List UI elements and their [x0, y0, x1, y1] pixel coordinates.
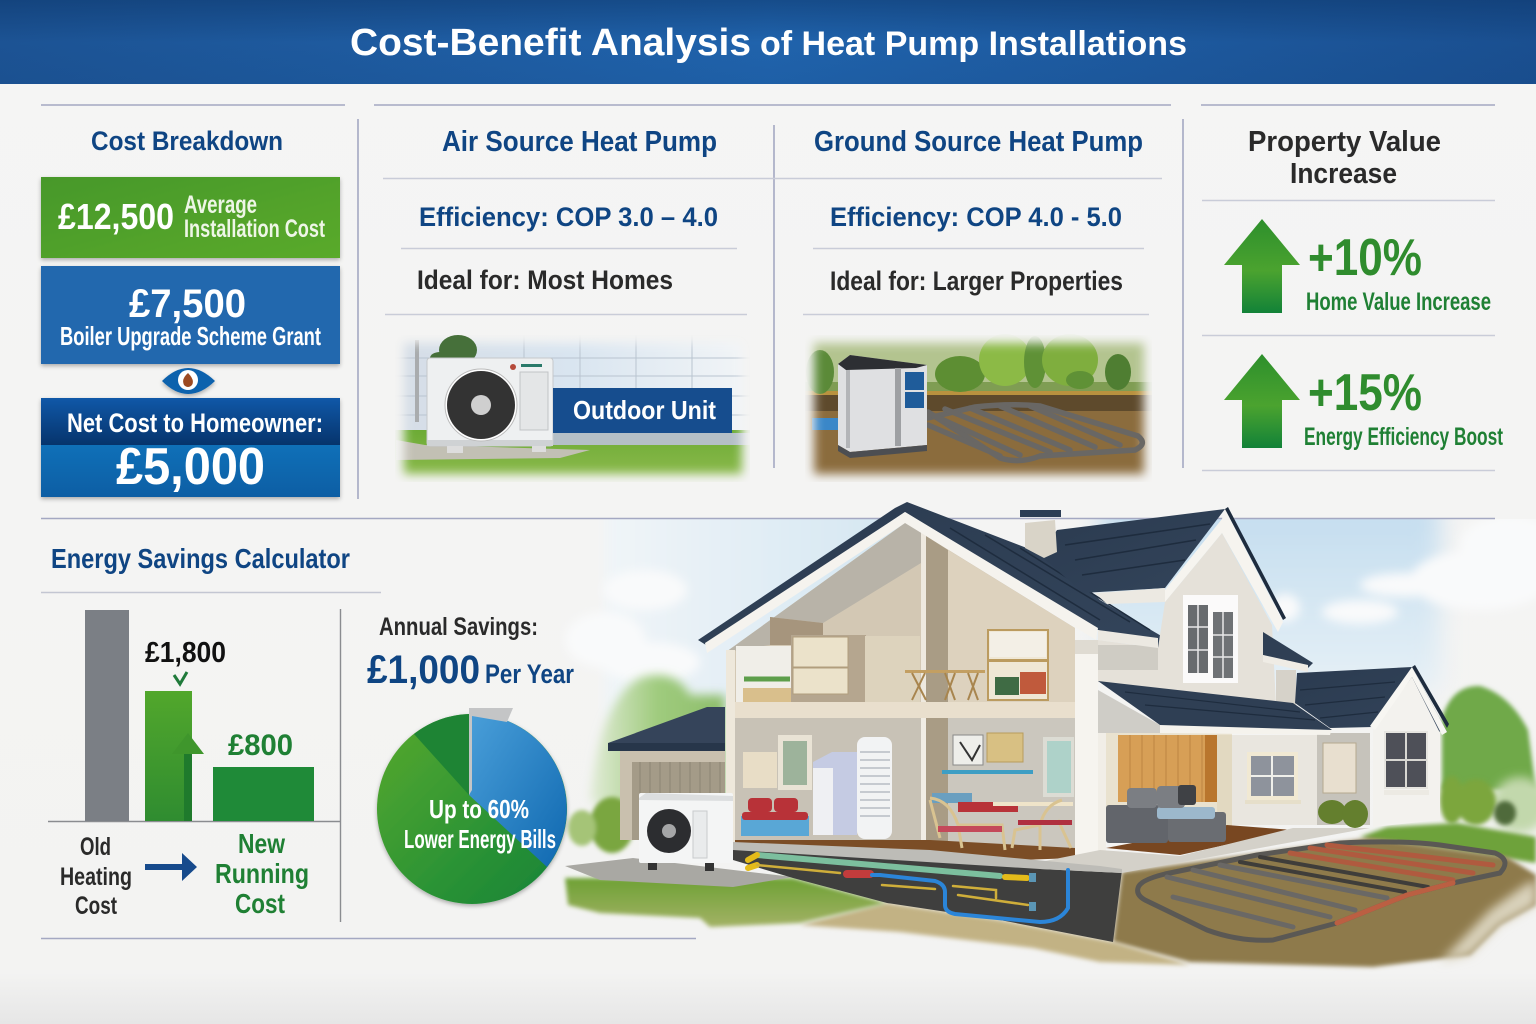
- chairs and table: [930, 798, 1072, 850]
- label: new running cost: New: [238, 828, 285, 859]
- label: new running cost: Running: [215, 858, 309, 889]
- card: average installation cost: Average: [184, 191, 257, 219]
- upper right wall: [1098, 533, 1276, 705]
- annual savings: [367, 613, 574, 692]
- panel: energy savings calculator: [41, 543, 574, 922]
- dormer fascia: [1165, 509, 1283, 632]
- bar chart: [48, 609, 340, 922]
- card: average installation cost: Installation Cost: [184, 215, 325, 243]
- pie chart: [377, 708, 567, 904]
- roof trim board: [1095, 588, 1165, 604]
- sky: [573, 519, 1536, 710]
- bar: new cost: [213, 767, 314, 821]
- icon: up arrow 10: [1224, 219, 1300, 313]
- card: net cost: Net Cost to Homeowner:: [67, 408, 323, 438]
- garage: [608, 707, 725, 840]
- title: Cost-Benefit Analysis: [350, 22, 751, 64]
- title: of Heat Pump Installations: [760, 25, 1187, 63]
- heading: cost breakdown: Cost Breakdown: [91, 126, 283, 156]
- value: 800: £800: [228, 729, 293, 762]
- heading: property value: Property Value: [1248, 126, 1441, 158]
- label: old heating cost: Heating: [60, 863, 132, 891]
- header banner: [0, 0, 1536, 84]
- bar: old cost: [85, 610, 129, 821]
- rear upper wall: [726, 523, 1075, 702]
- small roof: [1263, 632, 1313, 705]
- stat: home value: +10%: [1308, 229, 1422, 287]
- upper rooms: [736, 533, 1075, 703]
- annual savings: Per Year: [485, 659, 574, 689]
- ceiling: [726, 523, 921, 652]
- open patio: [1098, 732, 1293, 855]
- panel: property value increase: [1224, 126, 1503, 451]
- pie chart: Up to 60%: [429, 794, 529, 824]
- illustration: house cutaway: [41, 500, 1536, 967]
- icon: check: [174, 672, 187, 684]
- label: old heating cost: [60, 833, 132, 920]
- annual savings: £1,000: [367, 648, 480, 692]
- card: average installation cost: [41, 177, 340, 258]
- title: [350, 22, 1187, 64]
- ideal for: ground source: Ideal for: Larger Properties: [830, 266, 1123, 296]
- heading: property value: Increase: [1290, 158, 1397, 190]
- label: new running cost: Cost: [235, 888, 285, 919]
- concrete pad: [565, 858, 793, 887]
- walls and pillars: [726, 640, 1098, 856]
- lawn and soil: [565, 823, 1536, 967]
- annual savings: Annual Savings:: [379, 613, 538, 641]
- card: boiler upgrade grant: Boiler Upgrade Scheme Grant: [60, 321, 321, 351]
- label: old heating cost: Cost: [75, 892, 118, 920]
- panel: cost breakdown: [41, 126, 340, 497]
- middle wall: [1232, 733, 1370, 828]
- main roof trim: [1098, 630, 1158, 648]
- foundation: [733, 846, 1122, 942]
- ground floor rooms: [735, 718, 1075, 848]
- label: old heating cost: Old: [80, 833, 111, 861]
- heading: energy savings: Energy Savings Calculator: [51, 543, 350, 574]
- stat: energy efficiency: [1304, 364, 1503, 451]
- label: new running cost: [215, 828, 309, 919]
- label: outdoor unit: [553, 388, 732, 433]
- efficiency: air source: Efficiency: COP 3.0 – 4.0: [419, 202, 718, 232]
- ideal for: air source: Ideal for: Most Homes: [417, 265, 673, 295]
- illustration: outdoor unit: [395, 335, 750, 482]
- outdoor unit: [639, 793, 733, 871]
- card: boiler upgrade grant: £7,500: [129, 282, 246, 326]
- value: 1800: £1,800: [145, 637, 226, 669]
- illustration: ground loop unit: [805, 334, 1152, 482]
- chimney: [1020, 510, 1061, 558]
- icon: up arrow 15: [1224, 354, 1300, 448]
- trees: [568, 675, 1536, 853]
- efficiency: ground source: Efficiency: COP 4.0 - 5.0: [830, 202, 1122, 232]
- card: average installation cost: £12,500: [58, 196, 174, 237]
- second roof: [1040, 509, 1225, 593]
- dormer window: [1183, 595, 1238, 683]
- panel: air source heat pump: [395, 126, 750, 482]
- heading: air source: Air Source Heat Pump: [442, 126, 717, 158]
- sofa: [1106, 785, 1226, 843]
- card: net cost: [41, 398, 340, 497]
- stat: energy efficiency: +15%: [1308, 364, 1422, 422]
- icon: eye badge: [162, 368, 215, 394]
- gable fascia: [705, 512, 1098, 653]
- arrow: rising: [172, 733, 204, 821]
- room floor: [733, 840, 1075, 860]
- heading: ground source: Ground Source Heat Pump: [814, 126, 1143, 158]
- concrete path: [1040, 828, 1370, 873]
- floor slab: [735, 702, 1075, 718]
- ground loop coils: [1138, 842, 1505, 940]
- label: outdoor unit: Outdoor Unit: [573, 395, 716, 425]
- panel: ground source heat pump: [805, 126, 1152, 482]
- arrow: old to new: [145, 853, 197, 881]
- right wing: [1295, 665, 1449, 827]
- underground pipes: [748, 855, 1068, 922]
- bar: transition: [145, 691, 192, 821]
- card: boiler upgrade grant: [41, 266, 340, 364]
- porch roof: [1098, 681, 1332, 735]
- card: net cost: £5,000: [116, 438, 265, 496]
- stat: home value: [1306, 229, 1491, 316]
- main roof: [698, 502, 1163, 648]
- pie chart: Lower Energy Bills: [404, 824, 556, 854]
- heading: property value: [1248, 126, 1441, 190]
